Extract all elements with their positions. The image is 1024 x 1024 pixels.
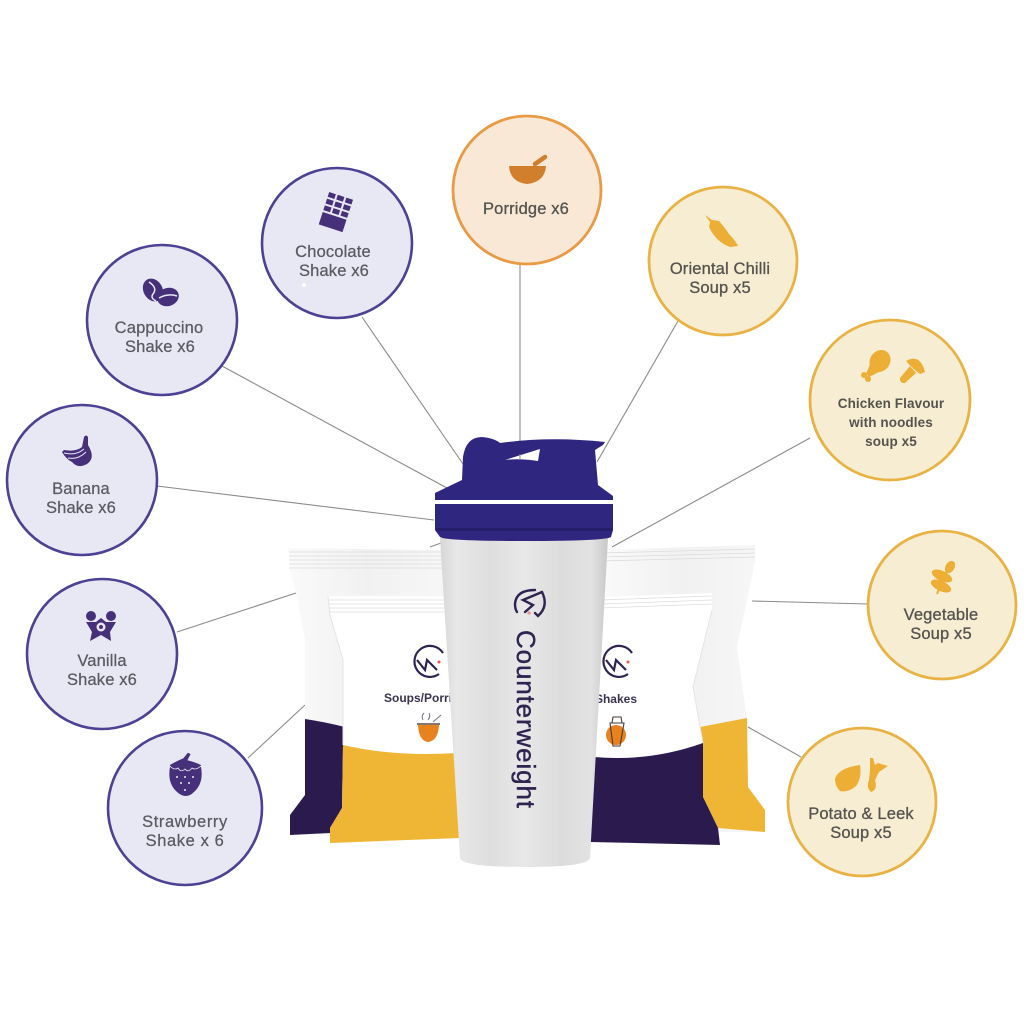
icon: bowl: [509, 157, 546, 184]
label: Oriental Chilli: [670, 260, 770, 278]
icon: potato: [835, 765, 860, 791]
label: Strawberry: [142, 813, 228, 831]
label: Shake x 6: [146, 832, 224, 850]
icon: leek: [868, 758, 888, 792]
icon: chilli: [705, 215, 738, 247]
label: Shake x6: [46, 499, 116, 517]
back right bag: [600, 545, 765, 832]
bottle lid: [435, 437, 613, 541]
icon: vegetable: [929, 559, 957, 595]
front right bag: [590, 593, 720, 845]
icon: coffee beans: [139, 275, 181, 309]
product bags, left pair: [288, 548, 474, 843]
bag logo: [414, 646, 443, 677]
bottle body: [440, 538, 608, 867]
icon: strawberry: [169, 752, 202, 796]
label: Vanilla: [77, 652, 127, 670]
panel: potato and leek soup: [788, 728, 936, 876]
bottle logo: [515, 590, 545, 616]
icon: chicken drumstick: [861, 346, 895, 382]
label: Cappuccino: [115, 319, 203, 337]
label: Vegetable: [904, 606, 978, 624]
label: Shake x6: [299, 262, 369, 280]
product bags, right pair: [590, 545, 765, 845]
panel: banana shake: [7, 405, 157, 555]
panel: chocolate shake: [262, 168, 412, 318]
label: Chicken Flavour: [838, 396, 945, 411]
label: Potato & Leek: [808, 805, 914, 823]
label: soup x5: [865, 434, 917, 449]
label: Soup x5: [910, 625, 972, 643]
bag logo: [603, 646, 632, 677]
panel: vanilla shake: [27, 579, 177, 729]
icon: banana bunch: [62, 436, 92, 466]
panel: oriental chilli soup: [649, 187, 797, 335]
icon: chocolate bar: [319, 192, 353, 232]
label: Soup x5: [689, 279, 751, 297]
label: Shake x6: [67, 671, 137, 689]
panel: porridge: [453, 116, 601, 264]
connector lines: [157, 265, 868, 758]
bag label: Soups/Porridge: [384, 691, 474, 705]
label: Chocolate: [295, 243, 371, 261]
panel: cappuccino shake: [87, 245, 237, 395]
label: Soup x5: [830, 824, 892, 842]
panel: chicken flavour with noodles soup: [810, 320, 970, 480]
label: with noodles: [848, 415, 933, 430]
icon: mushroom: [900, 359, 925, 383]
label: Shake x6: [125, 338, 195, 356]
front left bag: [328, 596, 474, 843]
panel: strawberry shake: [108, 731, 262, 885]
label: Porridge x6: [483, 200, 569, 218]
shaker bottle: [435, 437, 613, 867]
back left bag: [288, 548, 450, 835]
label: Banana: [52, 480, 111, 498]
panel: vegetable soup: [868, 531, 1016, 679]
bag icon: soup bowl: [417, 713, 441, 742]
bag icon: shaker cup: [606, 717, 626, 746]
bottle brand name: Counterweight: [511, 630, 541, 809]
bag label: Shakes: [595, 692, 637, 706]
icon: vanilla flower: [86, 611, 116, 641]
